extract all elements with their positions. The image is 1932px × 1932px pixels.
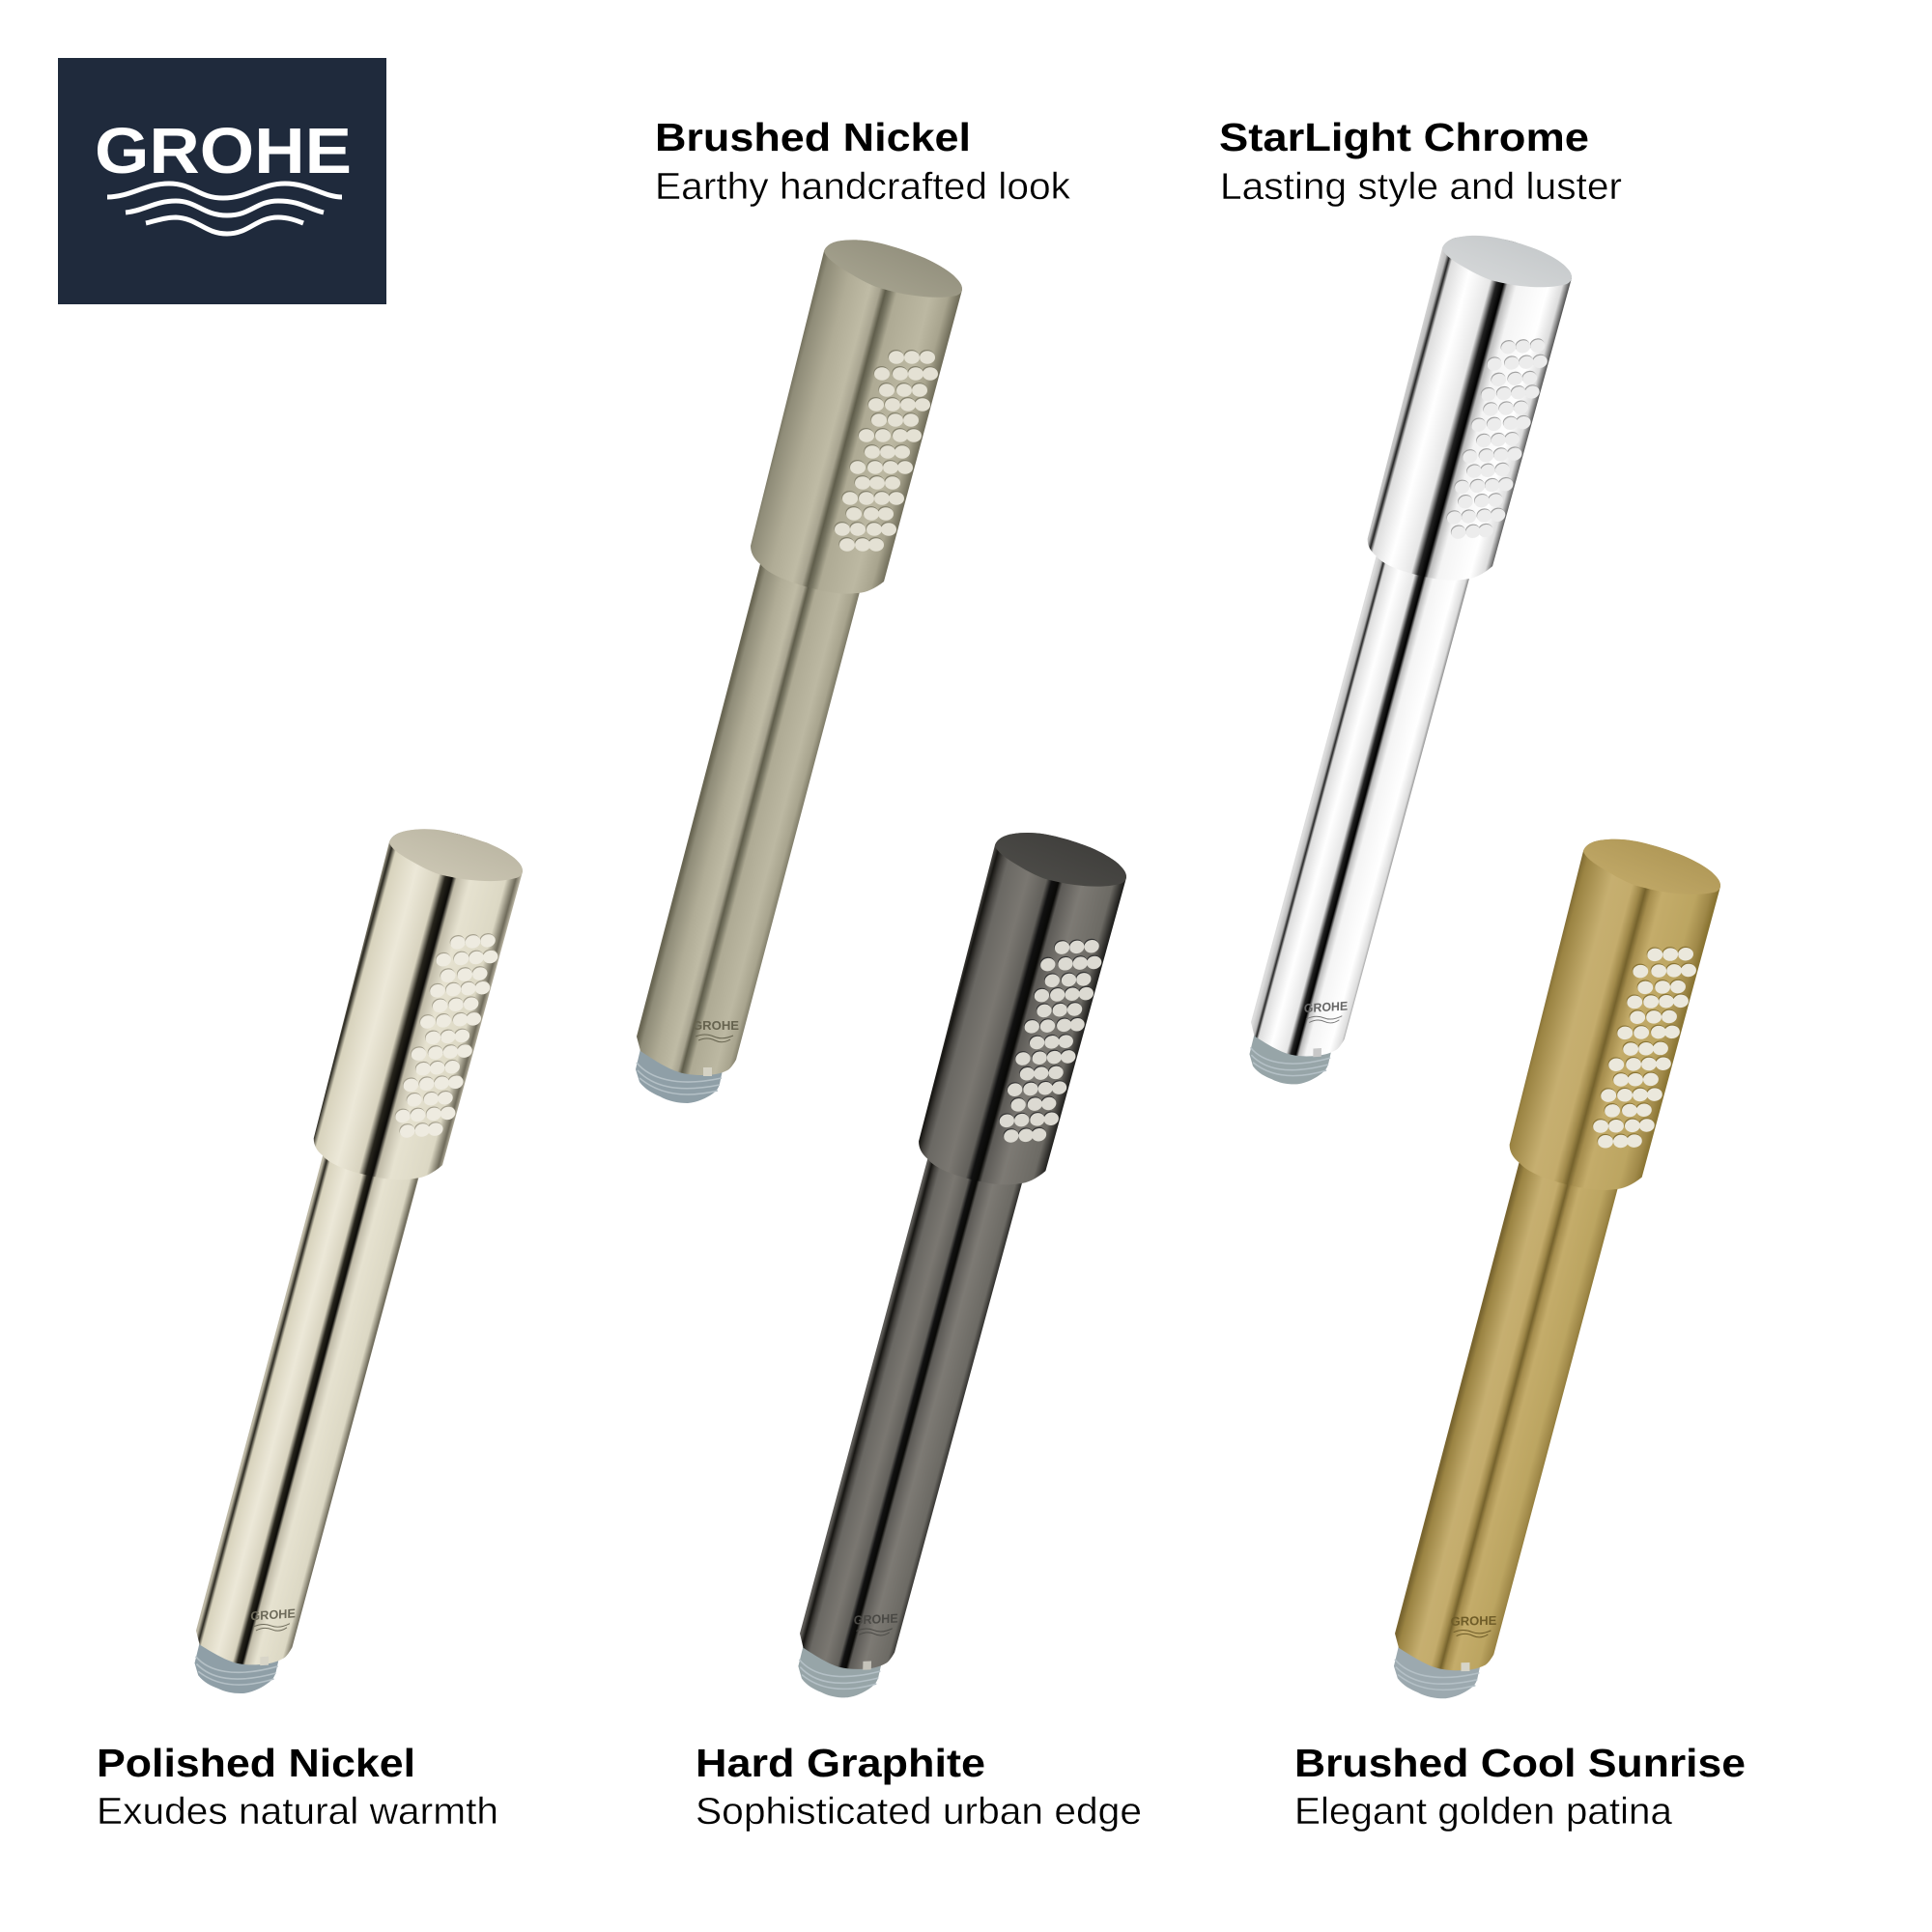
panel: hard graphite	[696, 828, 1142, 1833]
product: polished nickel shower	[194, 822, 524, 1696]
product: brushed cool sunrise shower: GROHE	[1451, 1613, 1497, 1629]
text: starlight chrome description: Lasting style and luster	[1220, 166, 1622, 208]
product: starlight chrome shower: GROHE	[1304, 999, 1348, 1015]
heading: brushed nickel: Brushed Nickel	[655, 115, 971, 159]
panel: polished nickel	[97, 822, 524, 1833]
heading: hard graphite: Hard Graphite	[696, 1741, 985, 1785]
logo: GROHE: GROHE	[95, 115, 352, 187]
text: polished nickel description: Exudes natural warmth	[97, 1791, 498, 1833]
product: starlight chrome shower	[1249, 230, 1573, 1087]
panel: starlight chrome	[1219, 115, 1622, 1087]
product: hard graphite shower	[798, 828, 1127, 1700]
panel: brushed cool sunrise	[1294, 837, 1746, 1833]
product: brushed cool sunrise shower	[1394, 837, 1720, 1699]
text: brushed cool sunrise description: Elegant golden patina	[1294, 1791, 1672, 1833]
product: brushed nickel shower: GROHE	[693, 1018, 739, 1033]
heading: brushed cool sunrise: Brushed Cool Sunrise	[1294, 1741, 1746, 1785]
logo: GROHE	[58, 58, 386, 304]
product: polished nickel shower: GROHE	[250, 1605, 296, 1623]
text: brushed nickel description: Earthy handcrafted look	[655, 166, 1071, 208]
panel: brushed nickel	[636, 115, 1071, 1103]
product: brushed nickel shower	[636, 240, 962, 1103]
text: hard graphite description: Sophisticated urban edge	[696, 1791, 1142, 1833]
heading: starlight chrome: StarLight Chrome	[1219, 115, 1589, 159]
product: hard graphite shower: GROHE	[854, 1611, 898, 1628]
heading: polished nickel: Polished Nickel	[97, 1741, 415, 1785]
